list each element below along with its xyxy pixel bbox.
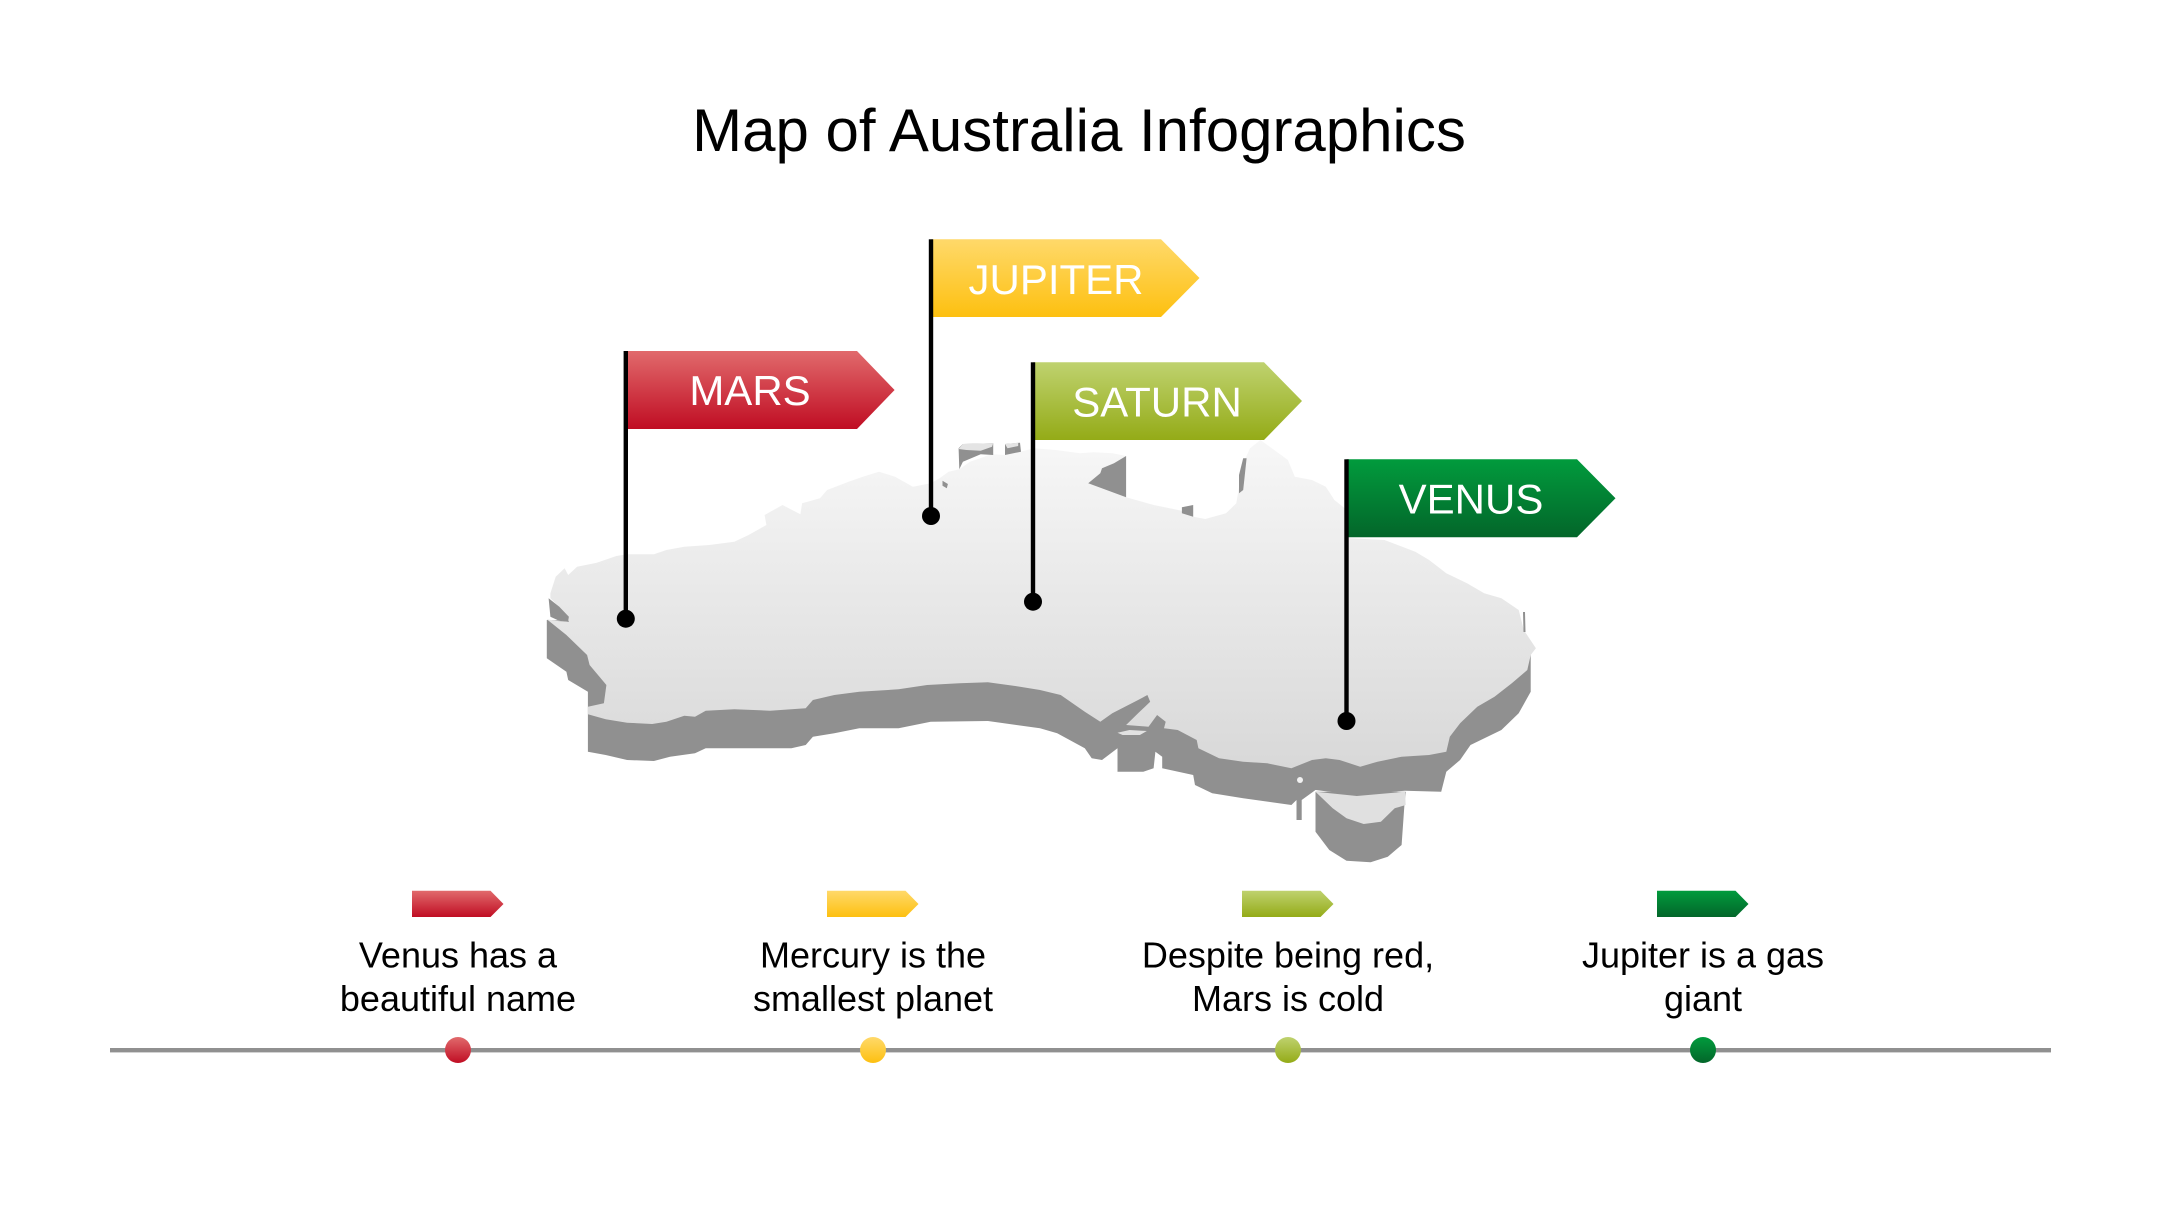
Mars pole <box>624 351 628 619</box>
legend item 3 <box>1142 891 1434 1063</box>
flag: Saturn <box>1024 362 1302 611</box>
Saturn pin <box>1024 593 1042 611</box>
legend item 4 <box>1582 891 1824 1063</box>
map: northern island tops <box>959 443 1018 451</box>
legend arrow: green <box>1657 891 1748 917</box>
legend item 1 <box>340 891 576 1063</box>
timeline dot: red <box>445 1037 471 1063</box>
legend text 3: Despite being red, <box>1142 935 1434 976</box>
flag: Jupiter <box>922 239 1200 525</box>
legend text 4: Jupiter is a gas <box>1582 935 1824 976</box>
timeline line <box>110 1048 2051 1052</box>
map: Tasmania top <box>1316 792 1406 824</box>
legend text 1: Venus has a <box>359 935 558 976</box>
Jupiter banner <box>931 239 1200 317</box>
Mars pin <box>617 610 635 628</box>
Mars label: MARS <box>689 367 811 414</box>
timeline dot: green <box>1690 1037 1716 1063</box>
timeline dot: olive <box>1275 1037 1301 1063</box>
map: Tasmania side <box>1316 792 1406 862</box>
Saturn banner <box>1033 362 1302 440</box>
legend text 3: Mars is cold <box>1192 978 1384 1019</box>
Venus label: VENUS <box>1399 475 1543 522</box>
Saturn pole <box>1031 362 1035 602</box>
map: extruded side <box>547 620 1531 820</box>
Jupiter pole <box>929 239 933 516</box>
flag: Venus <box>1338 459 1616 730</box>
legend text 4: giant <box>1664 978 1742 1019</box>
legend arrow: olive <box>1242 891 1334 917</box>
legend arrow: red <box>412 891 504 917</box>
map: northern coast shadows <box>942 443 1526 632</box>
Venus pin <box>1338 712 1356 730</box>
Venus pole <box>1344 459 1349 721</box>
timeline dot: yellow <box>860 1037 886 1063</box>
legend text 1: beautiful name <box>340 978 576 1019</box>
legend item 2 <box>753 891 993 1063</box>
Jupiter label: JUPITER <box>968 256 1144 303</box>
map: Bass Strait gap <box>1297 777 1303 783</box>
legend arrow: yellow <box>827 891 918 917</box>
map: Joseph Bonaparte Gulf <box>1088 456 1126 497</box>
map: Kangaroo Island <box>1118 730 1147 735</box>
legend text 2: Mercury is the <box>760 935 986 976</box>
Saturn label: SATURN <box>1072 378 1242 426</box>
Mars banner <box>626 351 895 429</box>
legend text 2: smallest planet <box>753 978 993 1019</box>
Jupiter pin <box>922 507 940 525</box>
map of Australia <box>547 440 1536 862</box>
flag: Mars <box>617 351 895 628</box>
title: Map of Australia Infographics <box>692 97 1466 164</box>
Venus banner <box>1346 459 1616 537</box>
map: top surface <box>547 440 1536 768</box>
map: Shark Bay <box>549 598 569 622</box>
